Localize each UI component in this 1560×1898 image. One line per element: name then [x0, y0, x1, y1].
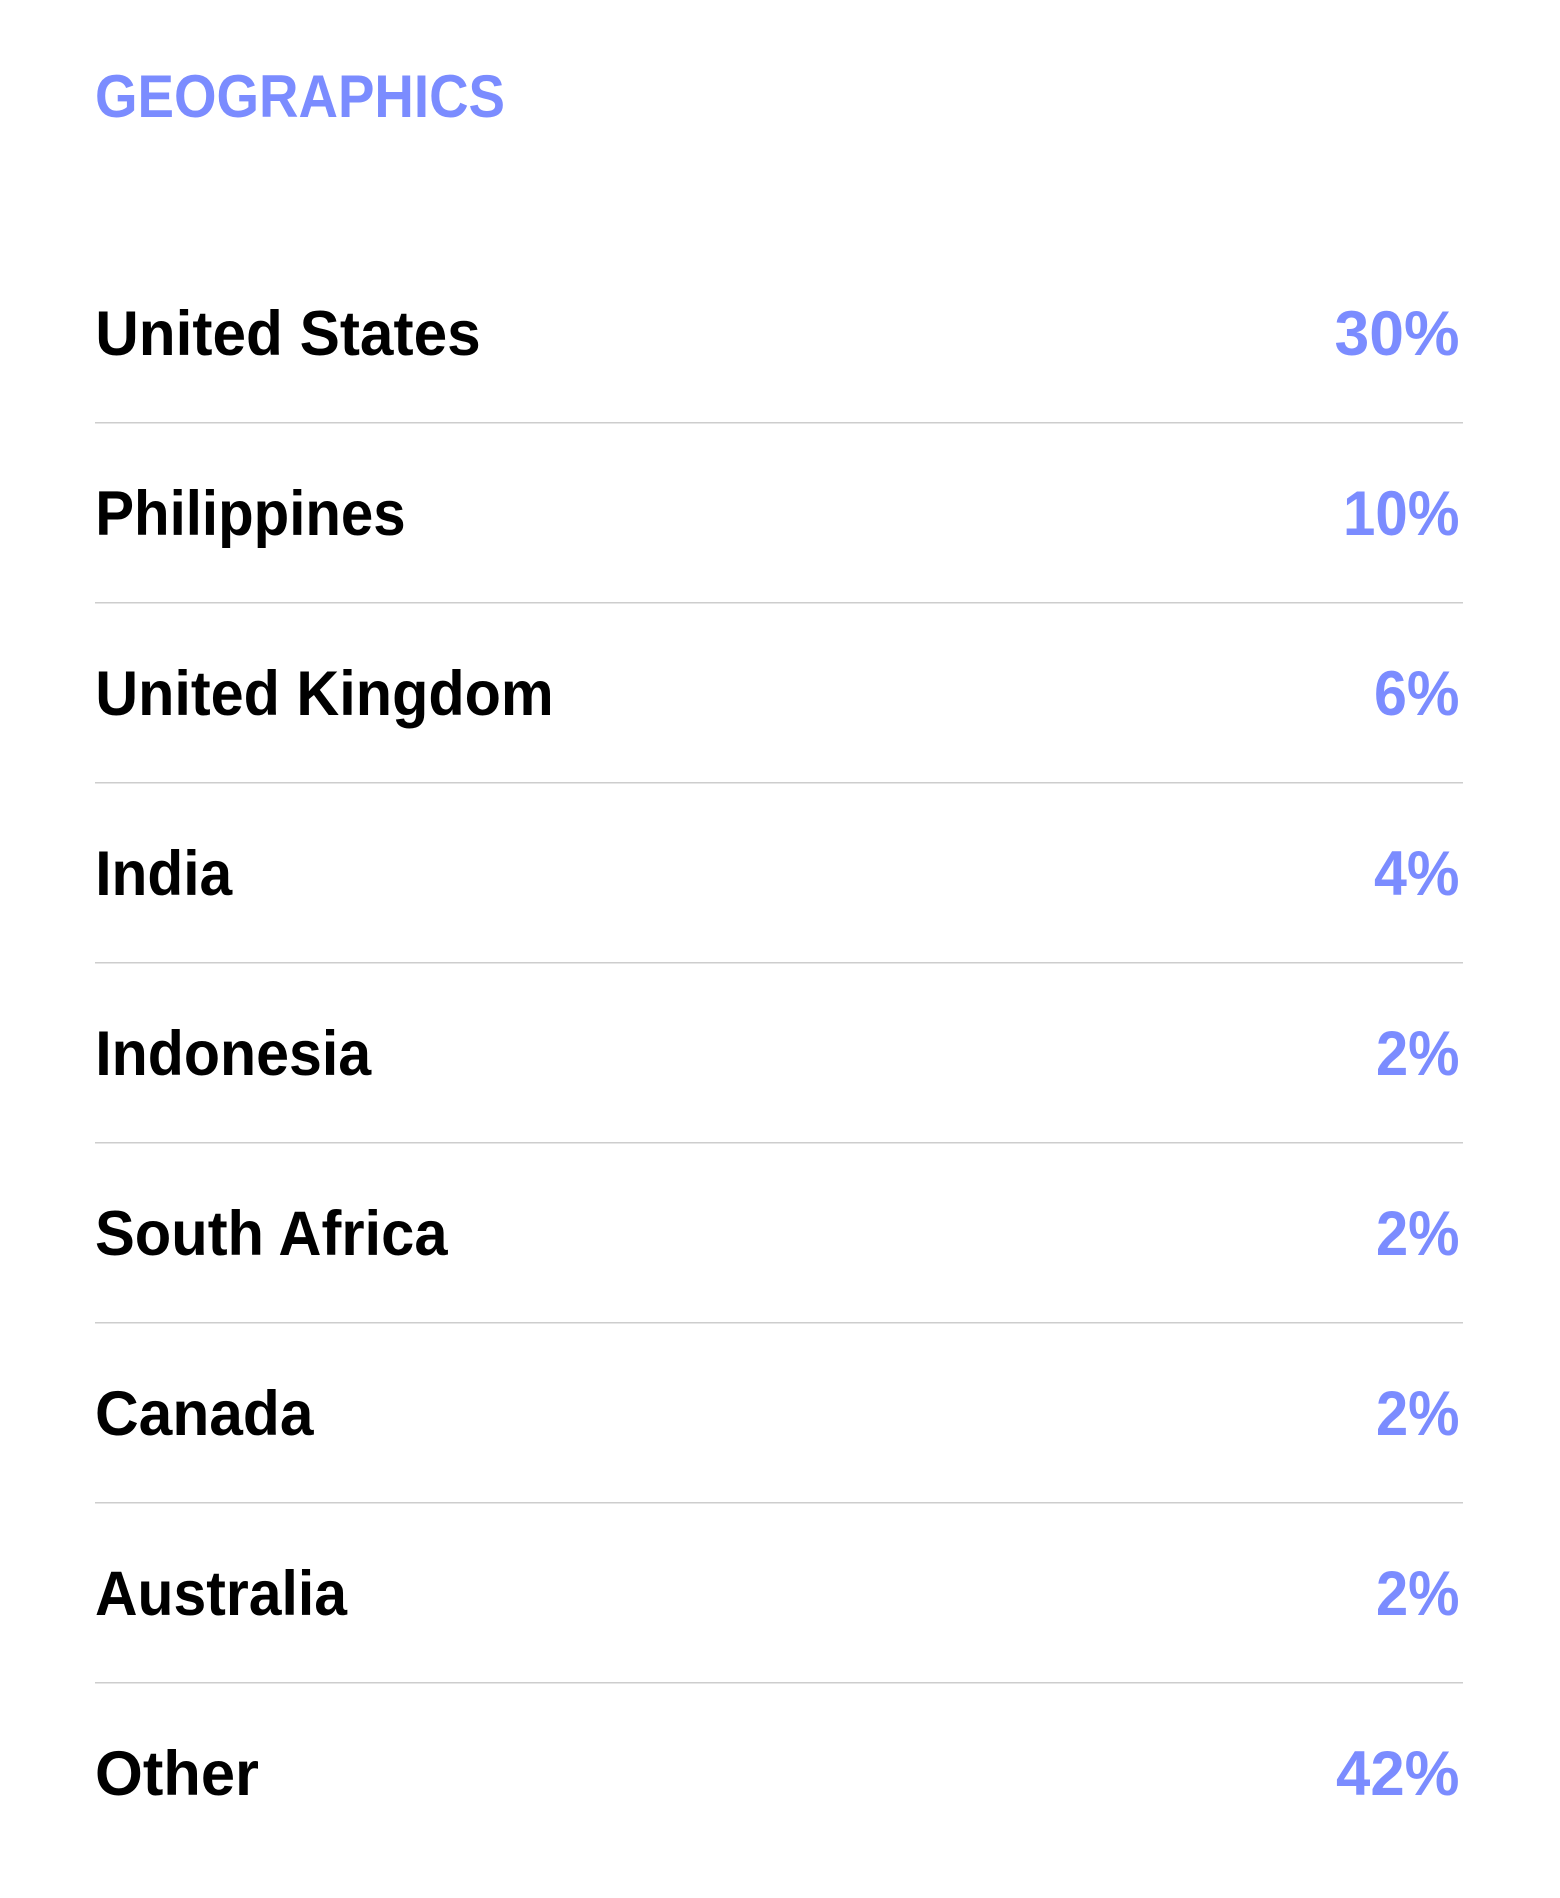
- row: United States: 30%: [1334, 299, 1460, 369]
- row: South Africa: 2%: [1376, 1199, 1460, 1269]
- row: Philippines: 10%: [1343, 479, 1460, 549]
- row: Philippines: Philippines: [95, 479, 406, 549]
- row: Other: 42%: [1336, 1739, 1460, 1809]
- row: India: 4%: [1374, 839, 1460, 909]
- row: South Africa: [95, 1199, 1460, 1269]
- row: South Africa: South Africa: [95, 1199, 448, 1269]
- row: Indonesia: 2%: [1376, 1019, 1460, 1089]
- row: Other: Other: [95, 1739, 259, 1809]
- row: United Kingdom: [95, 659, 1460, 729]
- row: Canada: 2%: [1376, 1379, 1460, 1449]
- row: Canada: [95, 1379, 1460, 1449]
- row: Australia: Australia: [95, 1559, 348, 1629]
- row: Indonesia: [95, 1019, 1460, 1089]
- row: Other: [95, 1739, 1460, 1809]
- title: GEOGRAPHICS: [95, 63, 505, 130]
- row: India: India: [95, 839, 233, 909]
- row: India: [95, 839, 1460, 909]
- row: United States: [95, 299, 1460, 369]
- row: United Kingdom: 6%: [1374, 659, 1460, 729]
- row: United Kingdom: United Kingdom: [95, 659, 554, 729]
- row: Indonesia: Indonesia: [95, 1019, 372, 1089]
- row: Australia: [95, 1559, 1460, 1629]
- row: Philippines: [95, 479, 1460, 549]
- row: United States: United States: [95, 299, 481, 369]
- row: Australia: 2%: [1376, 1559, 1460, 1629]
- row: Canada: Canada: [95, 1379, 314, 1449]
